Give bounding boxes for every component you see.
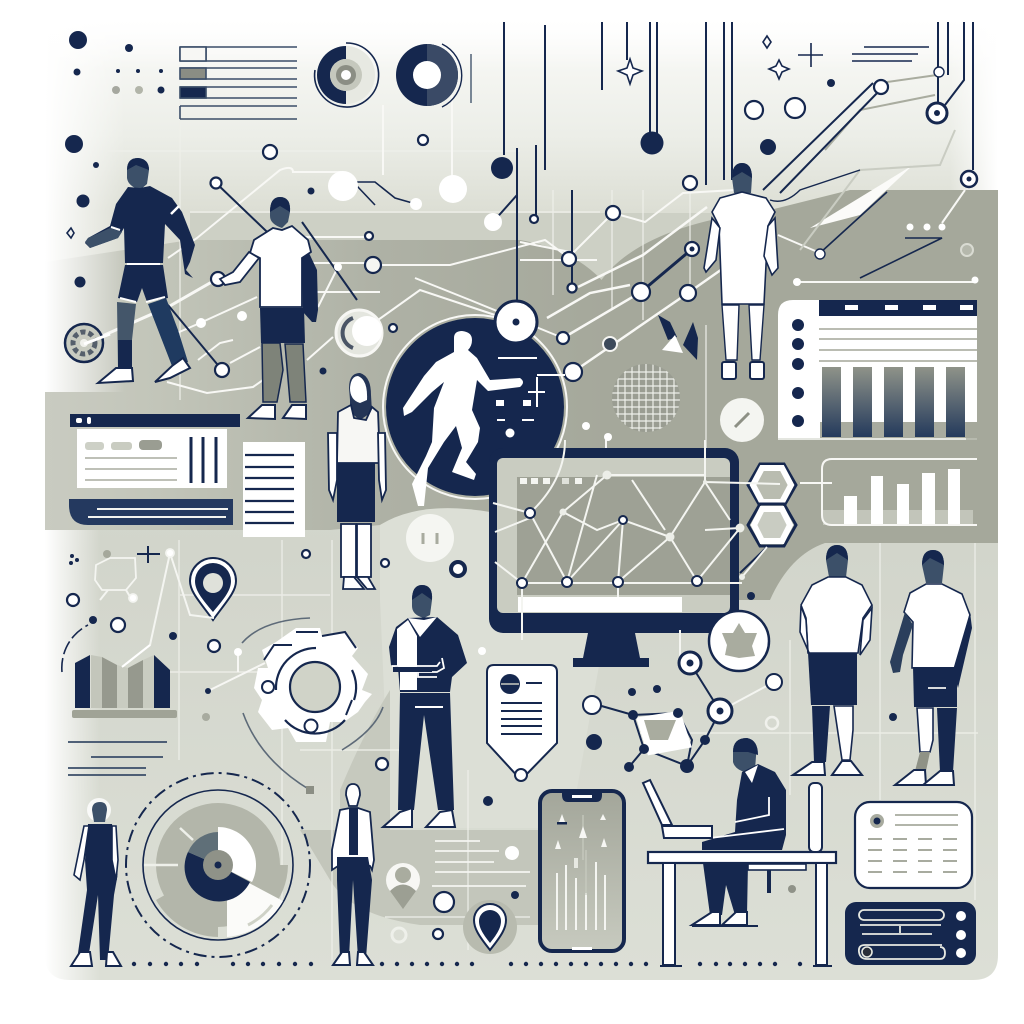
player 5 standing — [890, 550, 972, 785]
small rings — [67, 324, 465, 939]
left area bar chart — [62, 625, 177, 718]
sparkle icons top — [67, 36, 929, 238]
ball icon left — [65, 324, 110, 362]
hexagon chain icon — [740, 464, 796, 573]
white network lines — [84, 75, 975, 483]
network nodes — [210, 67, 944, 381]
server stack — [845, 902, 976, 965]
top left table — [180, 47, 297, 119]
top donut 2 — [396, 44, 471, 107]
small bar chart card — [822, 459, 977, 525]
location pin left — [190, 558, 236, 620]
person at desk with laptop — [643, 738, 836, 966]
woman figure — [328, 373, 386, 589]
outlet badge — [406, 514, 454, 562]
standing figure bottom center — [332, 784, 374, 965]
text lines bottom center — [432, 841, 530, 886]
navy dots — [65, 31, 897, 899]
profile pin — [386, 863, 420, 942]
monitor — [489, 440, 780, 667]
location pin bottom — [463, 900, 517, 954]
dotted baseline — [132, 962, 802, 966]
target node — [495, 301, 537, 343]
open white nodes — [196, 103, 978, 441]
smartphone — [540, 790, 624, 951]
radial chart — [126, 773, 310, 957]
player 4 standing — [793, 545, 872, 775]
sparkle left — [69, 554, 79, 565]
left browser panel — [69, 414, 240, 525]
gear — [202, 618, 383, 794]
document shield — [478, 647, 557, 781]
document card — [243, 442, 305, 537]
text rules — [68, 742, 167, 775]
standing figure bottom left — [71, 798, 121, 966]
right dashboard — [778, 300, 977, 440]
gauge badge — [720, 398, 764, 442]
top donut 1 — [315, 43, 379, 107]
dark wing mark — [658, 315, 698, 360]
player 3 white kit right — [704, 163, 778, 379]
navy network lines — [168, 22, 973, 370]
coach figure — [383, 585, 467, 827]
player 1 dark kit — [85, 158, 195, 383]
swirl icon — [336, 310, 382, 356]
line sketch left — [95, 546, 214, 667]
info card bottom right — [855, 802, 972, 888]
star badge — [709, 611, 769, 671]
molecule network — [583, 652, 782, 773]
central navy circle with runner — [383, 315, 567, 506]
grid lines — [108, 100, 978, 960]
globe grid — [612, 364, 680, 432]
player 2 white shirt — [220, 197, 318, 419]
